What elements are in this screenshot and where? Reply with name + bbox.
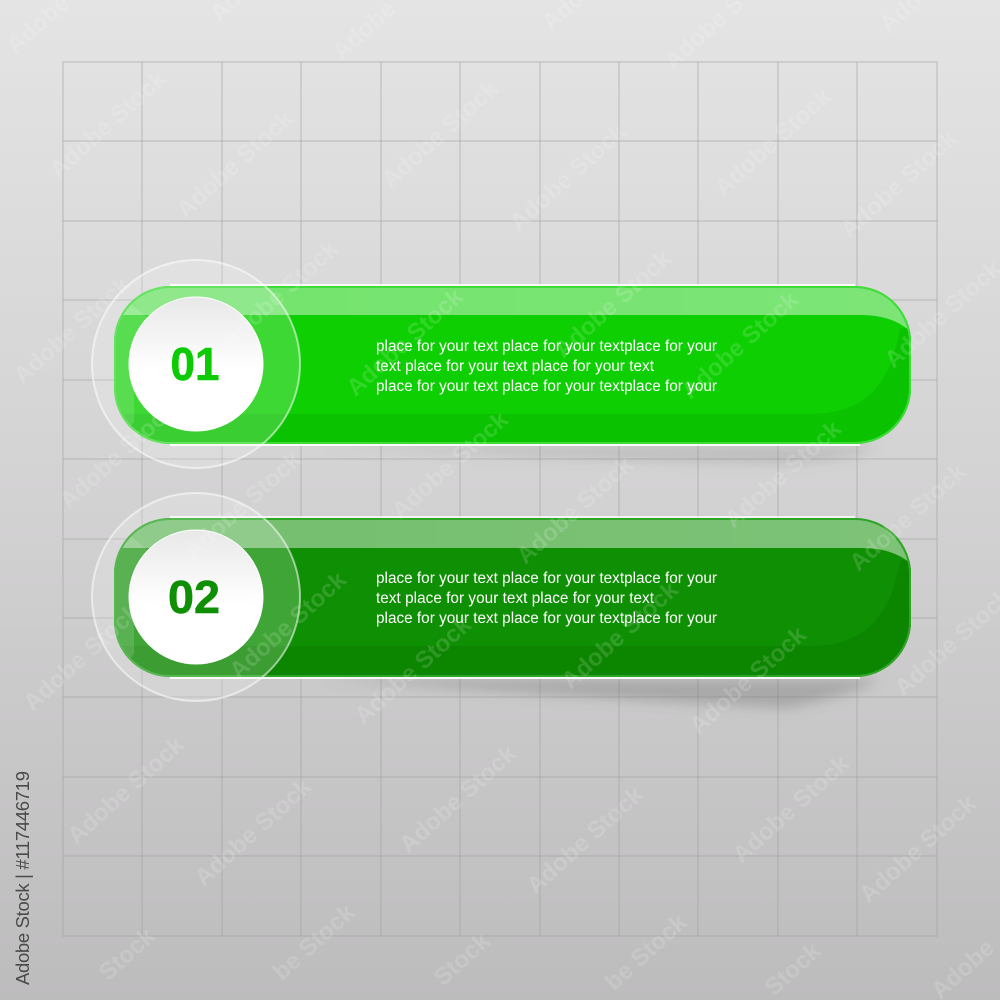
watermarks: Adobe Stock <box>676 286 804 405</box>
number badge 01 <box>129 297 263 431</box>
watermarks: Adobe Stock <box>835 125 963 244</box>
watermarks: Adobe Stock <box>18 598 146 717</box>
text block: banner 2: text place for your text place for your text <box>376 590 655 607</box>
watermarks: Adobe Stock <box>556 576 684 695</box>
watermarks: Stock <box>94 922 161 986</box>
text block: banner 1: text place for your text place for your text <box>376 358 655 375</box>
banner 2 <box>114 517 911 678</box>
watermarks: Adobe Stock <box>224 566 352 685</box>
text block: banner 2 <box>376 570 717 627</box>
glass ring: banner 1 <box>92 260 300 468</box>
watermarks: Adobe Stock <box>8 271 136 390</box>
watermarks: Adobe Stock <box>719 415 847 534</box>
watermarks: Adobe Stock <box>62 731 190 850</box>
stock id label: Adobe Stock | #117446719 <box>12 771 33 985</box>
shadow: banner 2 <box>320 679 880 708</box>
grid <box>63 62 937 936</box>
number badge 02: 02 <box>168 571 220 623</box>
number badge 01: 01 <box>170 338 220 390</box>
watermarks: Stock <box>429 927 496 991</box>
text block: banner 2: place for your text place for your textplace for your <box>376 570 717 587</box>
glass ring: banner 2 <box>92 493 300 701</box>
watermarks: be Stock <box>268 898 361 986</box>
text block: banner 1: place for your text place for your textplace for your <box>376 338 717 355</box>
watermarks: Adobe Stock <box>341 283 469 402</box>
text block: banner 2: place for your text place for your textplace for your <box>376 610 717 627</box>
watermarks: Adobe Stock <box>216 235 344 354</box>
watermarks: Adobe Stock <box>179 446 307 565</box>
number badge 02 <box>129 530 263 664</box>
watermarks: Adobe Stock <box>844 458 972 577</box>
watermarks: be Stock <box>600 908 693 996</box>
watermarks: Stock <box>760 937 827 1000</box>
text block: banner 1: place for your text place for your textplace for your <box>376 378 717 395</box>
watermarks: Adobe Stock <box>386 406 514 525</box>
watermarks: Adobe Stock <box>684 621 812 740</box>
watermarks: Adobe Stock <box>511 451 639 570</box>
watermarks: Adobe Stock <box>376 75 504 194</box>
watermarks: Adobe Stock <box>349 611 477 730</box>
watermarks: Adobe Stock <box>521 781 649 900</box>
watermarks: Adobe Stock <box>44 65 172 184</box>
watermarks: Adobe Stock <box>727 750 855 869</box>
watermarks: Adobe Stock <box>189 773 317 892</box>
text block: banner 1 <box>376 338 717 395</box>
watermarks: Adobe Stock <box>854 790 982 909</box>
banner 1 <box>114 285 911 445</box>
watermarks: Adobe Stock <box>54 396 182 515</box>
shadow: banner 1 <box>320 446 880 464</box>
watermarks: Adobe Stock <box>709 83 837 202</box>
watermarks: Adobe Stock <box>549 245 677 364</box>
watermarks: Adobe Stock <box>394 740 522 859</box>
watermarks: Adobe Stock <box>504 118 632 237</box>
watermarks: Adobe Stock <box>171 105 299 224</box>
